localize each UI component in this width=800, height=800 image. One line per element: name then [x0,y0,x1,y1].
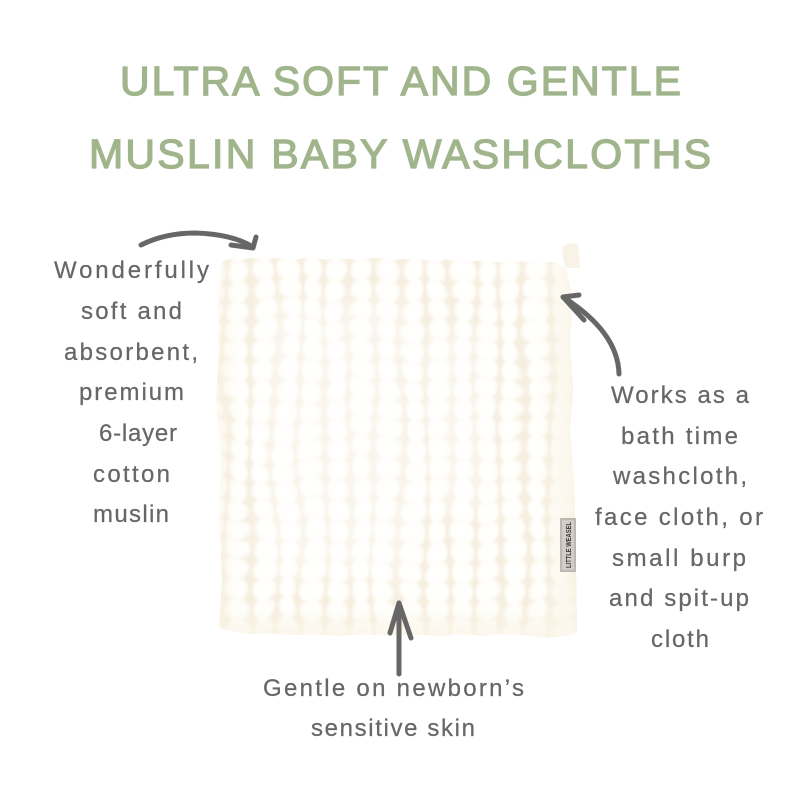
hanging loop [562,243,580,268]
text: left callout: muslin [93,501,169,528]
text: right callout: small burp [612,545,746,572]
text: bottom callout: Gentle on newborn’s [263,675,524,702]
text: left callout [54,257,209,528]
arrow: top left [141,233,256,248]
text: right callout: bath time [621,423,738,450]
text: right callout: washcloth, [612,463,747,490]
text: right callout: cloth [651,626,709,653]
text: bottom callout [263,675,524,742]
title [89,58,711,177]
arrow: bottom [390,603,411,674]
text: left callout: soft and [81,298,182,325]
title: MUSLIN BABY WASHCLOTHS [89,131,711,177]
washcloth image [216,243,580,638]
text: right callout: and spit-up [609,585,749,612]
text: right callout [595,382,763,653]
text: right callout: Works as a [611,382,750,409]
arrow: right [563,295,619,374]
text: left callout: 6-layer [99,420,177,447]
muslin cloth [216,258,577,638]
label tag: Little Weasel: LITTLE WEASEL [564,522,573,568]
label tag: Little Weasel [560,518,576,572]
text: left callout: cotton [93,461,170,488]
title: ULTRA SOFT AND GENTLE [120,58,681,104]
text: left callout: absorbent, [64,339,198,366]
text: left callout: Wonderfully [54,257,209,284]
text: bottom callout: sensitive skin [311,715,475,742]
text: right callout: face cloth, or [595,504,763,531]
text: left callout: premium [79,379,184,406]
